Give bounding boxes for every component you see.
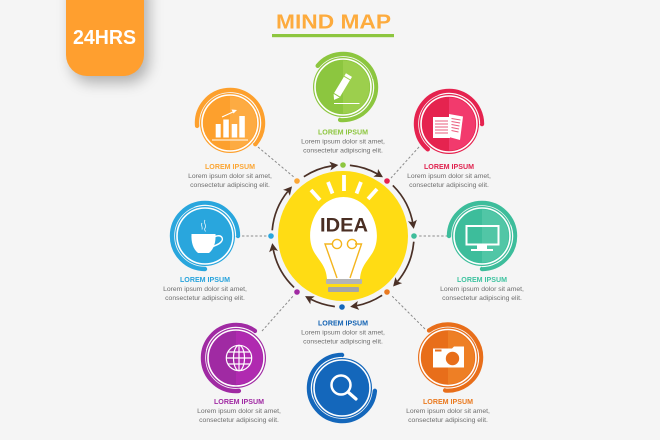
icon: documents [433, 114, 463, 140]
node text: green [301, 128, 385, 154]
node: orange chart [191, 84, 269, 162]
node text: blue [163, 276, 247, 302]
icon: light rays [311, 175, 377, 200]
node text: purple: LOREM IPSUM [214, 398, 264, 406]
node: dark blue magnifier [303, 349, 381, 427]
node text: dark orange: Lorem ipsum dolor sit amet, [406, 408, 490, 415]
node text: blue: Lorem ipsum dolor sit amet, [163, 286, 247, 293]
node text: dark blue [301, 320, 385, 346]
cycle arrows [243, 136, 443, 336]
node text: dark orange [406, 398, 490, 424]
node text: purple: consectetur adipiscing elit. [199, 417, 279, 424]
dashed connectors [242, 147, 448, 331]
node text: blue: consectetur adipiscing elit. [165, 295, 245, 302]
node: blue cup [166, 197, 244, 275]
badge: 24HRS [66, 0, 144, 76]
node text: purple [197, 398, 281, 424]
node text: green: Lorem ipsum dolor sit amet, [301, 138, 385, 146]
title: MIND MAP [276, 12, 391, 34]
icon: coffee cup [191, 220, 222, 253]
node text: red: LOREM IPSUM [424, 163, 474, 171]
icon: bar chart [212, 110, 248, 140]
node text: dark blue: Lorem ipsum dolor sit amet, [301, 330, 385, 336]
node text: red: consectetur adipiscing elit. [409, 182, 489, 189]
node text: red: Lorem ipsum dolor sit amet, [407, 173, 491, 180]
node text: teal [440, 276, 524, 302]
icon: pencil [331, 73, 360, 104]
node text: red [407, 163, 491, 189]
node text: teal: Lorem ipsum dolor sit amet, [440, 286, 524, 293]
node text: orange: LOREM IPSUM [205, 163, 255, 171]
node text: purple: Lorem ipsum dolor sit amet, [197, 408, 281, 415]
node text: teal: LOREM IPSUM [457, 276, 507, 284]
node: dark orange camera [402, 312, 494, 403]
node: purple globe [198, 320, 274, 396]
node: red documents [403, 78, 495, 170]
icon: magnifier [332, 376, 356, 399]
cycle dots [268, 162, 417, 310]
icon: globe [226, 345, 252, 371]
node: teal monitor [443, 197, 521, 275]
idea label: IDEA [320, 214, 368, 236]
node text: blue: LOREM IPSUM [180, 276, 230, 284]
node text: orange: consectetur adipiscing elit. [190, 182, 270, 189]
node text: dark blue: LOREM IPSUM [318, 320, 368, 328]
node text: green: LOREM IPSUM [318, 128, 368, 136]
node text: dark orange: LOREM IPSUM [423, 398, 473, 406]
node text: orange [188, 163, 272, 189]
icon: monitor [466, 226, 498, 251]
central idea circle [278, 171, 408, 301]
node: green pencil [297, 41, 389, 133]
badge label: 24HRS [73, 26, 136, 49]
icon: light bulb [310, 197, 377, 292]
icon: camera [433, 346, 464, 368]
node text: dark orange: consectetur adipiscing elit. [408, 417, 488, 424]
node text: green: consectetur adipiscing elit. [303, 148, 383, 154]
node text: dark blue: consectetur adipiscing elit. [303, 338, 383, 346]
node text: teal: consectetur adipiscing elit. [442, 295, 522, 302]
node text: orange: Lorem ipsum dolor sit amet, [188, 173, 272, 180]
